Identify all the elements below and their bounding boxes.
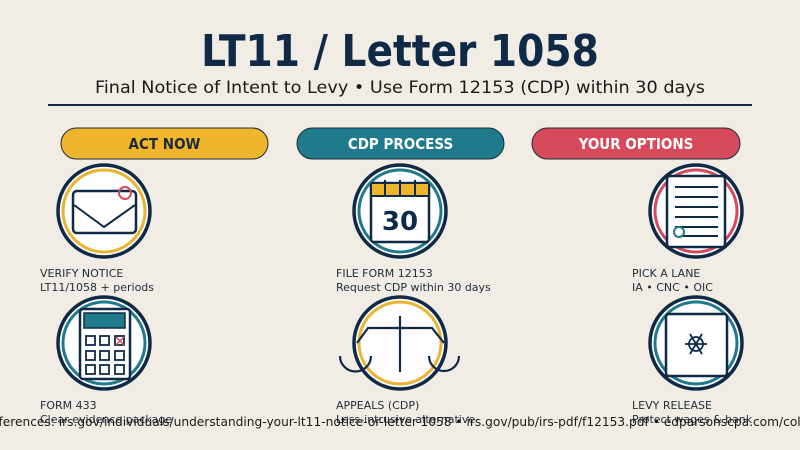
subtitle: Final Notice of Intent to Levy • Use Form 12153 (CDP) within 30 days [95, 78, 705, 98]
text: file form: FILE FORM 12153 [336, 267, 433, 280]
icon: calendar 30: 30 [382, 207, 418, 237]
icon: calculator [58, 297, 150, 389]
text: appeals: APPEALS (CDP) [336, 399, 419, 412]
text: form 433: FORM 433 [40, 399, 97, 412]
text: levy release: LEVY RELEASE [632, 399, 712, 412]
text: pick a lane: IA • CNC • OIC [632, 281, 713, 294]
text: verify notice: LT11/1058 + periods [40, 281, 154, 294]
text: appeals: Less-intrusive alternative [336, 413, 475, 426]
pill: act now [61, 128, 268, 159]
icon: safe [650, 297, 742, 389]
text: pick a lane [632, 267, 713, 294]
text: pick a lane: PICK A LANE [632, 267, 700, 280]
icon: scales [340, 297, 459, 389]
pill: cdp process: CDP PROCESS [348, 135, 453, 153]
text: verify notice: VERIFY NOTICE [40, 267, 123, 280]
icon: envelope [58, 165, 150, 257]
title: LT11 / Letter 1058 [201, 27, 599, 77]
text: file form: Request CDP within 30 days [336, 281, 491, 294]
text: form 433: Clear evidence package [40, 413, 172, 426]
text: file form [336, 267, 491, 294]
text: levy release: Protect wages & bank [632, 413, 753, 426]
text: levy release [632, 399, 753, 426]
text: appeals [336, 399, 475, 426]
text: form 433 [40, 399, 172, 426]
pill: cdp process [297, 128, 504, 159]
pill: your options: YOUR OPTIONS [578, 135, 693, 153]
text: verify notice [40, 267, 154, 294]
icon: document [650, 165, 742, 257]
pill: your options [532, 128, 740, 159]
icon: calendar 30 [354, 165, 446, 257]
pill: act now: ACT NOW [129, 135, 201, 153]
